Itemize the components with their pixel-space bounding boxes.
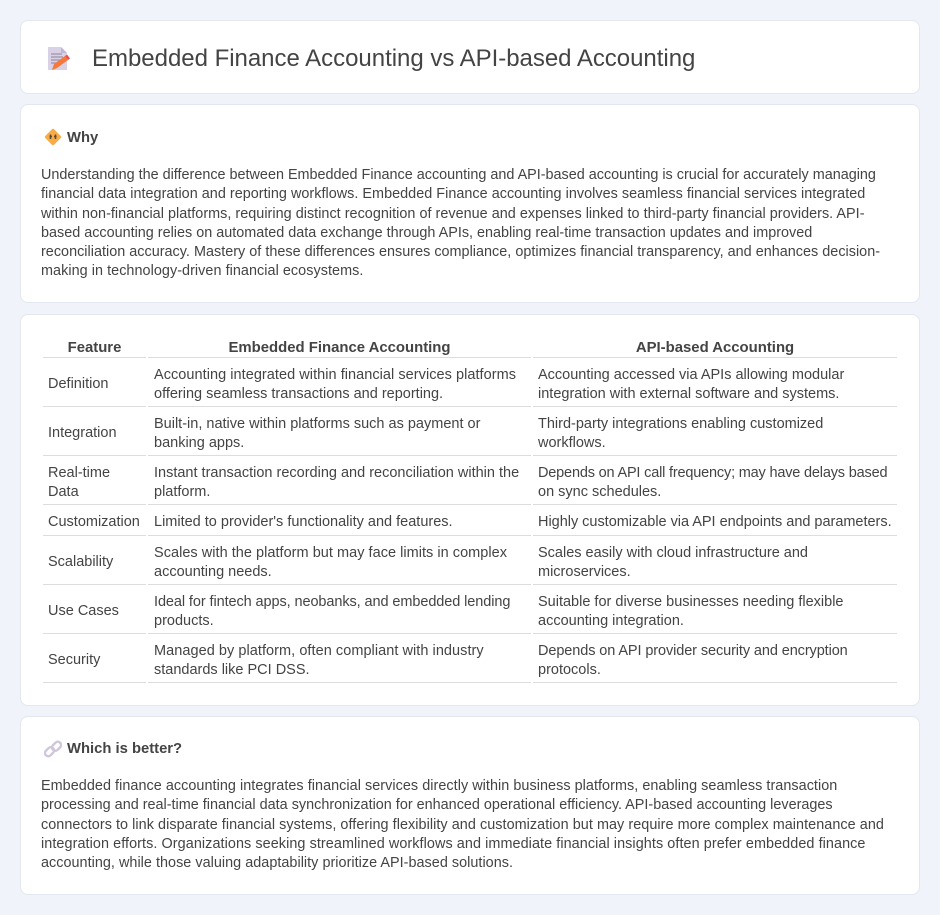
use cases: embedded [154,594,510,629]
row: security: Security [48,652,100,668]
icon: chain link [44,740,62,758]
use cases: api: accounting integration. [538,613,684,629]
icon: warning diamond [44,128,62,146]
row: integration: Integration [48,425,117,441]
scalability: api: microservices. [538,564,631,580]
real-time data: embedded: Instant transaction recording and reconciliation within the [154,465,519,481]
text block: why: making in technology-driven financial ecosystems. [41,263,363,279]
heading: which is better: Which is better? [67,741,182,757]
row: real-time data: Real-time [48,465,110,481]
use cases: embedded: Ideal for fintech apps, neobanks, and embedded lending [154,594,510,610]
title: Embedded Finance Accounting vs API-based Accounting [92,45,695,72]
text block: which is better: integration efforts. Organizations seeking streamlined workflows and immediate financial insights often prefer embedded finance [41,836,866,852]
definition: api: Accounting accessed via APIs allowing modular [538,367,844,383]
text block: why: Understanding the difference between Embedded Finance accounting and API-based accounting is crucial for accurately managing [41,167,876,183]
integration: embedded: Built-in, native within platforms such as payment or [154,416,480,432]
integration: embedded: banking apps. [154,435,244,451]
customization: embedded: Limited to provider's functionality and features. [154,514,453,530]
real-time data: embedded: platform. [154,484,210,500]
real-time data: api: Depends on API call frequency; may have delays based [538,465,887,481]
text block: which is better: accounting, while those valuing adaptability prioritize API-based solutions. [41,855,513,871]
scalability: api: Scales easily with cloud infrastructure and [538,545,808,561]
text block: which is better [41,778,884,871]
table header: api-based accounting: API-based Accounting [636,340,794,356]
scalability: embedded: Scales with the platform but may face limits in complex [154,545,507,561]
integration: embedded [154,416,480,451]
definition: api [538,367,844,402]
text block: why: within non-financial platforms, requiring distinct recognition of revenue and expenses linked to third-party financial providers. API- [41,206,865,222]
security: embedded [154,643,484,678]
heading: why: Why [67,130,98,146]
use cases: api: Suitable for diverse businesses needing flexible [538,594,844,610]
real-time data: api: on sync schedules. [538,484,661,500]
text block: why: reconciliation accuracy. Mastery of these differences ensures compliance, optimizes financial transparency, and enhances decision- [41,244,880,260]
security: api: Depends on API provider security and encryption [538,643,848,659]
use cases: api [538,594,844,629]
icon: document with pencil [48,47,70,70]
definition: embedded: offering seamless transactions and reporting. [154,386,443,402]
integration: api [538,416,823,451]
security: embedded: Managed by platform, often compliant with industry [154,643,484,659]
text block: which is better: Embedded finance accounting integrates financial services directly within business platforms, enabling seamless transaction [41,778,837,794]
customization: api: Highly customizable via API endpoints and parameters. [538,514,892,530]
row: customization: Customization [48,514,140,530]
row: use cases: Use Cases [48,603,119,619]
text block: which is better: connectors to link disparate financial systems, offering flexibility and customization but may require more complex maintenance and [41,817,884,833]
definition: api: integration with external software and systems. [538,386,839,402]
integration: api: Third-party integrations enabling customized [538,416,823,432]
definition: embedded: Accounting integrated within financial services platforms [154,367,516,383]
scalability: embedded: accounting needs. [154,564,272,580]
row: scalability: Scalability [48,554,113,570]
text block: which is better: processing and real-time financial data synchronization for enhanced operational efficiency. API-based accounting leverages [41,797,833,813]
scalability: api [538,545,808,580]
panel: which is better [20,716,920,895]
row: definition: Definition [48,376,108,392]
text block: why: financial data integration and reporting workflows. Embedded Finance accounting involves seamless financial services integrated [41,186,865,202]
use cases: embedded: products. [154,613,214,629]
panel: why [20,104,920,303]
row: real-time data [48,465,110,500]
text block: why: based accounting relies on automated data exchange through APIs, enabling real-time transaction updates and improved [41,225,812,241]
row: real-time data: Data [48,484,79,500]
table header: feature: Feature [68,340,121,356]
definition: embedded [154,367,516,402]
security: api [538,643,848,678]
scalability: embedded [154,545,507,580]
integration: api: workflows. [538,435,606,451]
real-time data: api [538,465,887,500]
text block: why [41,167,880,279]
panel: comparison table card [20,314,920,706]
security: api: protocols. [538,662,601,678]
real-time data: embedded [154,465,519,500]
security: embedded: standards like PCI DSS. [154,662,310,678]
panel: title card [20,20,920,94]
table header: embedded finance accounting: Embedded Finance Accounting [228,340,450,356]
